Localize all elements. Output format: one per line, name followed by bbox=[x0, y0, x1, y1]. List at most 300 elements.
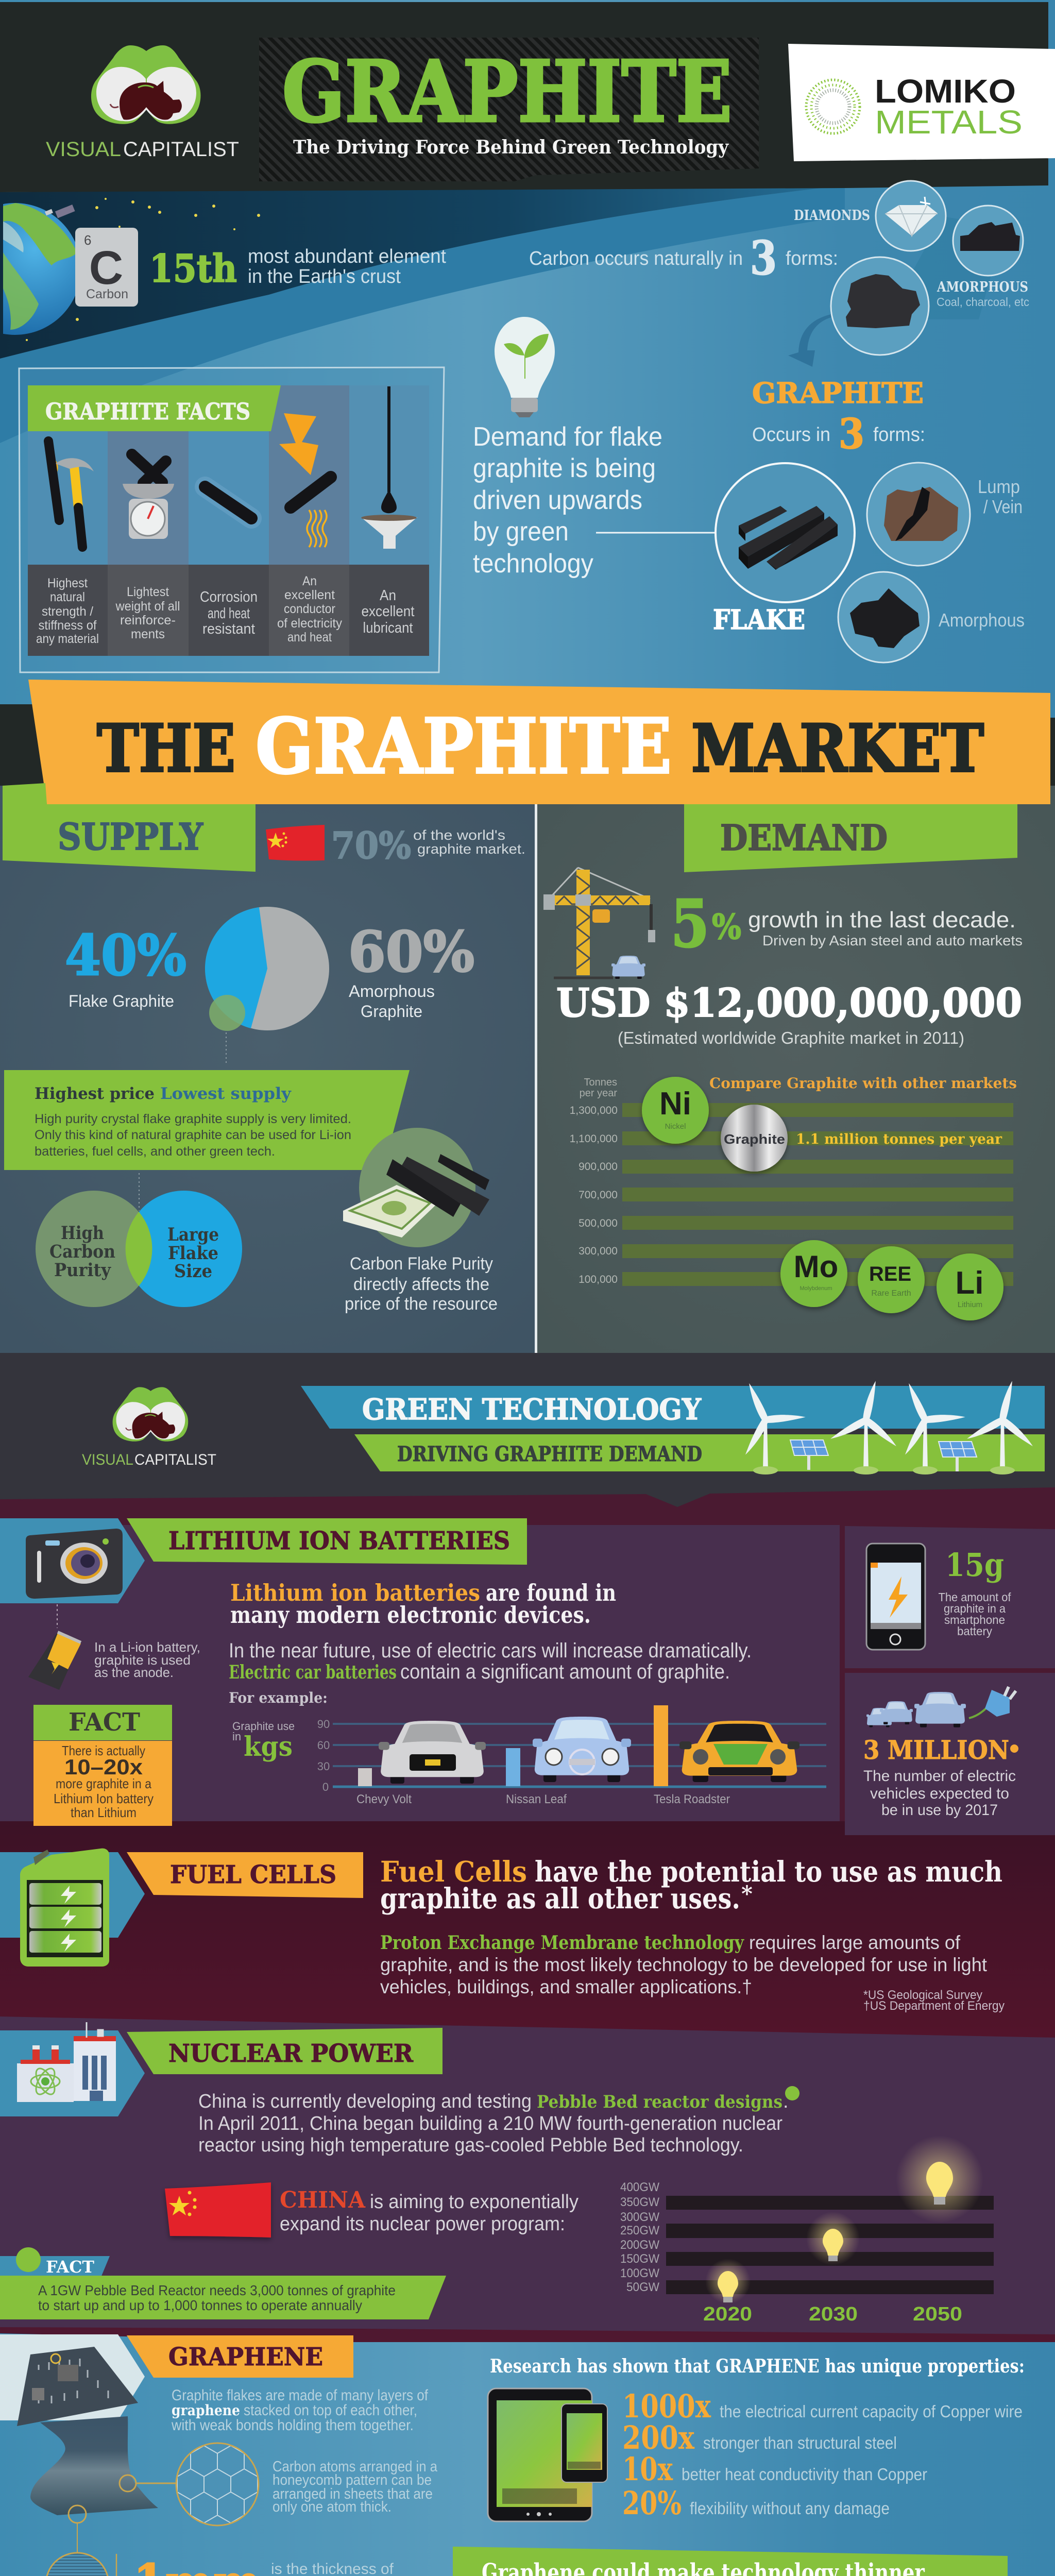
axis title: kgs bbox=[244, 1731, 293, 1762]
callout: china 70% bbox=[266, 824, 525, 867]
text: usd 12 billion bbox=[556, 980, 1022, 1047]
icon: china flag large bbox=[165, 2182, 271, 2238]
axis title bbox=[580, 1077, 617, 1099]
callout: highest price lowest supply: Highest price bbox=[35, 1084, 155, 1103]
marker: molybdenum: Mo bbox=[794, 1249, 838, 1284]
section background: purple and maroon bbox=[0, 1484, 1055, 2349]
text: lithium ion intro: Electric car batteries bbox=[229, 1662, 397, 1683]
text: 15th most abundant bbox=[149, 246, 446, 291]
icon: hammer and graphite rod bbox=[48, 441, 94, 547]
element tile: carbon bbox=[75, 228, 138, 307]
heading: graphite facts bbox=[28, 385, 281, 431]
callout: lithium fact: There is actually bbox=[62, 1743, 145, 1758]
axis labels: 1,100,000 bbox=[570, 1133, 618, 1145]
label: graphite tonnage: 1.1 million tonnes per year bbox=[796, 1131, 1002, 1147]
text: carbon occurs in 3 forms: 3 bbox=[750, 231, 777, 285]
logo: Lomiko Metals: LOMIKO bbox=[875, 73, 1016, 110]
marker: rare earth bbox=[858, 1246, 925, 1313]
axis labels: 100,000 bbox=[578, 1274, 618, 1285]
property: 200x bbox=[622, 2419, 897, 2456]
text: amorphous label: Coal, charcoal, etc bbox=[937, 295, 1029, 309]
property: 20%: 20% bbox=[622, 2484, 682, 2522]
chart: flake vs amorphous pie bbox=[65, 907, 474, 1064]
tab: fuel cells bbox=[0, 1852, 363, 1938]
callout: lithium fact bbox=[33, 1705, 172, 1826]
icon: battery bbox=[28, 1632, 81, 1690]
icon: diamond circle: DIAMONDS bbox=[794, 208, 870, 224]
panel: electric vehicles: 3 MILLION bbox=[863, 1735, 1009, 1765]
text: lithium ion intro: contain a significant amount of graphite. bbox=[400, 1660, 730, 1683]
icon: corrosion resistant rod bbox=[205, 487, 251, 518]
text: pebble bed intro: In April 2011, China began building a 210 MW fourth-generation nuclear bbox=[198, 2113, 782, 2134]
callout: china expansion: is aiming to exponentially bbox=[370, 2191, 578, 2213]
text: demand for flake graphite: Demand for flake bbox=[473, 422, 662, 452]
text: fuel cells intro: Fuel Cells bbox=[380, 1855, 527, 1888]
icon: money with graphite bars bbox=[343, 1128, 489, 1247]
text: carbon flake purity bbox=[345, 1254, 498, 1314]
text: 5% growth: Driven by Asian steel and auto markets bbox=[762, 933, 1023, 948]
text: carbon atoms: Carbon atoms arranged in a bbox=[273, 2459, 438, 2475]
icon: lubricant funnel bbox=[361, 386, 417, 549]
text: graphite occurs in 3 forms: forms: bbox=[873, 424, 925, 446]
text: pebble bed intro: Pebble Bed reactor designs bbox=[537, 2092, 782, 2112]
chart: venn diagram: Large bbox=[167, 1224, 219, 1245]
icon: flake graphite circle: FLAKE bbox=[713, 604, 805, 636]
title: GRAPHITE bbox=[282, 43, 732, 141]
text: lithium ion intro: many modern electronic devices. bbox=[230, 1601, 591, 1629]
marker: lithium: Li bbox=[955, 1265, 984, 1301]
panel: smartphone graphite: graphite in a bbox=[944, 1602, 1006, 1615]
axis labels: 150GW bbox=[620, 2252, 659, 2266]
axis title: in bbox=[232, 1730, 241, 1743]
text: fact labels: strength / bbox=[42, 604, 93, 619]
text: fact labels: excellent bbox=[284, 588, 335, 602]
property: 20% bbox=[622, 2484, 890, 2522]
text: 15th most abundant: in the Earth's crust bbox=[248, 266, 401, 287]
marker: graphite: Graphite bbox=[724, 1131, 785, 1147]
text: graphene layers: stacked on top of each other, bbox=[244, 2402, 417, 2419]
text: fuel cells intro: * bbox=[741, 1881, 753, 1906]
panel: electric vehicles bbox=[863, 1687, 1018, 1819]
text: fact labels: reinforce- bbox=[120, 613, 176, 628]
icon: camera bbox=[26, 1529, 123, 1599]
text: demand for flake graphite bbox=[473, 422, 662, 579]
icon: coal circle bbox=[953, 206, 1023, 276]
callout: highest price lowest supply bbox=[4, 1070, 410, 1170]
text: pebble bed intro bbox=[198, 2086, 799, 2156]
axis labels: 700,000 bbox=[578, 1189, 618, 1201]
marker: graphite bbox=[721, 1105, 788, 1172]
text: graphite occurs in 3 forms bbox=[752, 376, 925, 458]
icon: smartphone bbox=[866, 1544, 925, 1650]
text: graphene layers: Graphite flakes are made of many layers of bbox=[172, 2387, 429, 2404]
logo: visual capitalist small: VISUAL bbox=[82, 1451, 133, 1468]
chart: venn diagram: Carbon bbox=[49, 1241, 115, 1262]
icon: bulb 2030 bbox=[806, 2212, 860, 2265]
axis labels bbox=[570, 1105, 618, 1285]
callout: pebble bed fact: FACT bbox=[46, 2257, 94, 2277]
property: 200x: 200x bbox=[622, 2419, 695, 2456]
marker: nickel: Nickel bbox=[665, 1122, 686, 1131]
banner: driving graphite demand bbox=[354, 1434, 1045, 1471]
panel: smartphone graphite: 15g bbox=[945, 1546, 1004, 1584]
text: fact labels: and heat bbox=[287, 630, 332, 645]
labels: Nissan Leaf bbox=[506, 1792, 567, 1806]
text: 15th most abundant: 15th bbox=[149, 247, 237, 291]
section background: blue top bbox=[0, 0, 1055, 721]
callout: china 70%: 70% bbox=[331, 824, 411, 867]
icon: bulb 2050 bbox=[896, 2136, 983, 2223]
text: carbon atoms: only one atom thick. bbox=[273, 2499, 392, 2515]
logo: Visual Capitalist: VISUAL bbox=[46, 138, 121, 161]
logo: visual capitalist small: CAPITALIST bbox=[134, 1451, 216, 1468]
heading: demand: DEMAND bbox=[720, 818, 888, 859]
grid and axis: 0 bbox=[322, 1781, 329, 1793]
text: 1mm thickness bbox=[133, 2553, 402, 2576]
element tile: carbon: Carbon bbox=[86, 287, 128, 301]
grid and axis bbox=[317, 1718, 826, 1793]
year labels: 2030 bbox=[809, 2303, 858, 2325]
axis labels bbox=[620, 2180, 659, 2294]
text: demand for flake graphite: graphite is being bbox=[473, 453, 656, 483]
text: li-ion anode: as the anode. bbox=[94, 1665, 174, 1680]
marker: molybdenum: Molybdenum bbox=[800, 1285, 832, 1292]
text: li-ion anode: In a Li-ion battery, bbox=[94, 1639, 200, 1655]
text: fact labels: of electricity bbox=[277, 616, 342, 631]
icon: earth with satellite bbox=[0, 198, 260, 341]
axis labels: 350GW bbox=[620, 2195, 659, 2209]
icon: wind turbines and solar panels bbox=[742, 1380, 1035, 1475]
bars bbox=[358, 1705, 668, 1786]
text: sources bbox=[863, 1988, 1005, 2013]
logo: Visual Capitalist bbox=[46, 45, 239, 161]
banner: the graphite market: MARKET bbox=[691, 710, 984, 787]
icon: tesla roadster bbox=[679, 1721, 799, 1782]
year labels: 2050 bbox=[913, 2303, 962, 2325]
text: fact labels bbox=[36, 574, 414, 646]
axis labels: 1,300,000 bbox=[570, 1105, 618, 1116]
text: pebble bed intro: China is currently developing and testing bbox=[198, 2091, 532, 2112]
text: usd 12 billion: USD $12,000,000,000 bbox=[556, 980, 1022, 1026]
property: 1000x: the electrical current capacity of Copper wire bbox=[720, 2402, 1023, 2421]
text: pebble bed intro: . bbox=[783, 2091, 789, 2112]
property: 10x bbox=[622, 2450, 927, 2488]
axis labels: 500,000 bbox=[578, 1217, 618, 1229]
property: 20%: flexibility without any damage bbox=[690, 2499, 890, 2518]
icon: lump vein circle bbox=[867, 463, 1023, 566]
label: 60% amorphous graphite: Graphite bbox=[361, 1002, 422, 1021]
logo: Lomiko Metals: METALS bbox=[875, 104, 1023, 141]
text: fact labels: and heat bbox=[208, 605, 250, 622]
text: graphite occurs in 3 forms: GRAPHITE bbox=[752, 376, 924, 410]
labels bbox=[356, 1792, 730, 1806]
text: proton exchange membrane: requires large amounts of bbox=[749, 1932, 961, 1953]
panel: smartphone graphite: smartphone bbox=[944, 1613, 1005, 1626]
axis labels: 900,000 bbox=[578, 1161, 618, 1173]
icon: flake graphite circle bbox=[713, 463, 855, 636]
icon: bulb 2020 bbox=[705, 2259, 751, 2304]
icon: china flag bbox=[266, 825, 325, 861]
text: graphene layers: graphene bbox=[172, 2402, 240, 2419]
year labels: 2020 bbox=[703, 2303, 752, 2325]
text: carbon occurs in 3 forms: forms: bbox=[786, 248, 838, 269]
panel: smartphone graphite: battery bbox=[957, 1624, 992, 1638]
callout: highest price lowest supply: High purity crystal flake graphite supply is very limited. bbox=[35, 1112, 351, 1126]
heading: graphite facts: GRAPHITE FACTS bbox=[45, 399, 250, 425]
marker: rare earth: Rare Earth bbox=[871, 1289, 911, 1298]
icon: chevy volt bbox=[379, 1721, 486, 1784]
text: graphite occurs in 3 forms: 3 bbox=[839, 410, 864, 458]
grid and axis: 30 bbox=[317, 1760, 330, 1773]
text: li-ion anode bbox=[94, 1639, 200, 1680]
text: sources: *US Geological Survey bbox=[863, 1988, 982, 2002]
icon: lightning and conductor rod bbox=[279, 413, 331, 547]
text: fact labels: weight of all bbox=[115, 599, 180, 614]
property: 200x: stronger than structural steel bbox=[703, 2433, 897, 2452]
text: li-ion anode: graphite is used bbox=[94, 1652, 191, 1668]
year labels bbox=[703, 2303, 962, 2325]
callout: lithium fact: more graphite in a bbox=[56, 1776, 151, 1791]
icon: diamond circle bbox=[794, 181, 1005, 319]
icon: weighing scale bbox=[123, 454, 174, 539]
callout: graphene could make technology bbox=[453, 2547, 1008, 2576]
tab: lithium ion bbox=[0, 1518, 527, 1603]
text: amorphous label: AMORPHOUS bbox=[937, 279, 1028, 295]
property: 1000x: 1000x bbox=[622, 2387, 711, 2425]
labels: Tesla Roadster bbox=[654, 1792, 730, 1806]
callout: lithium fact: than Lithium bbox=[71, 1805, 137, 1820]
axis labels: 400GW bbox=[620, 2180, 659, 2194]
callout: lithium fact: FACT bbox=[69, 1708, 140, 1737]
icon: amorphous graphite circle: Amorphous bbox=[939, 609, 1025, 631]
panel: graphite facts bbox=[19, 367, 444, 672]
marker: lithium bbox=[937, 1253, 1003, 1320]
text: fact labels: An bbox=[302, 574, 317, 588]
marker: nickel: Ni bbox=[659, 1086, 691, 1122]
callout: highest price lowest supply: batteries, fuel cells, and other green tech. bbox=[35, 1144, 275, 1159]
text: carbon flake purity: price of the resource bbox=[345, 1294, 498, 1314]
text: fact labels: stiffness of bbox=[38, 618, 97, 633]
tab: lithium ion: LITHIUM ION BATTERIES bbox=[168, 1527, 510, 1555]
tab: nuclear power: NUCLEAR POWER bbox=[168, 2039, 414, 2068]
banner: green technology: GREEN TECHNOLOGY bbox=[362, 1393, 702, 1427]
text: carbon occurs in 3 forms: Carbon occurs naturally in bbox=[529, 248, 743, 269]
axis labels: 250GW bbox=[620, 2224, 659, 2238]
banner: green technology bbox=[301, 1386, 1045, 1429]
title bbox=[259, 38, 759, 181]
text: pebble bed intro: reactor using high temperature gas-cooled Pebble Bed technology. bbox=[198, 2134, 743, 2156]
text: 5% growth: % bbox=[712, 907, 741, 947]
text: carbon flake purity: directly affects the bbox=[353, 1275, 489, 1294]
axis labels: 300GW bbox=[620, 2210, 659, 2224]
text: 5% growth: growth in the last decade. bbox=[748, 907, 1016, 933]
icon: crane and car bbox=[543, 868, 655, 979]
property: 10x: 10x bbox=[622, 2450, 673, 2488]
label: 40% flake graphite: Flake Graphite bbox=[69, 992, 174, 1010]
section background: graphene bbox=[0, 2327, 1055, 2576]
axis title bbox=[232, 1720, 295, 1762]
marker: molybdenum bbox=[780, 1240, 847, 1307]
title: The Driving Force Behind Green Technology bbox=[293, 137, 729, 158]
callout: pebble bed fact: A 1GW Pebble Bed Reactor needs 3,000 tonnes of graphite bbox=[38, 2282, 396, 2298]
chart: venn diagram: Purity bbox=[54, 1260, 112, 1281]
icon: amorphous graphite circle bbox=[838, 572, 1025, 663]
property: 1000x bbox=[622, 2387, 1023, 2425]
text: proton exchange membrane bbox=[380, 1932, 988, 1997]
text: fuel cells intro bbox=[380, 1855, 1002, 1915]
bars bbox=[622, 1103, 1013, 1286]
arrow: amorphous to graphite bbox=[788, 314, 831, 367]
chart: venn diagram: Flake bbox=[168, 1243, 218, 1264]
text: sources: †US Department of Energy bbox=[863, 1999, 1005, 2013]
text: lithium ion intro: In the near future, use of electric cars will increase dramatically. bbox=[229, 1639, 752, 1662]
text: 5% growth bbox=[671, 886, 1023, 962]
heading: supply bbox=[3, 783, 256, 872]
bars bbox=[666, 2196, 994, 2294]
icon: light bulb with sprout bbox=[495, 317, 555, 417]
text: carbon occurs in 3 forms bbox=[529, 231, 838, 285]
panel: electric vehicles: The number of electric bbox=[863, 1768, 1016, 1785]
chart: nuclear capacity bbox=[620, 2136, 994, 2325]
panel: electric vehicles: be in use by 2017 bbox=[881, 1802, 998, 1819]
text: graphene layers bbox=[171, 2387, 429, 2434]
banner: the graphite market bbox=[28, 680, 1050, 804]
chart: venn diagram: Size bbox=[174, 1261, 212, 1282]
text: graphene layers: with weak bonds holding them together. bbox=[171, 2417, 414, 2434]
axis title: Graphite use bbox=[232, 1720, 295, 1733]
tab: graphene: GRAPHENE bbox=[168, 2343, 323, 2371]
text: fuel cells intro: graphite as all other uses. bbox=[380, 1882, 740, 1915]
icon: nuclear plant bbox=[17, 2022, 116, 2102]
text: lithium ion intro: For example: bbox=[229, 1689, 328, 1706]
icon: amorphous circle bbox=[831, 257, 929, 355]
section: green technology band bbox=[0, 1353, 1055, 1507]
label: 60% amorphous graphite: Amorphous bbox=[349, 982, 435, 1001]
logo: Visual Capitalist: CAPITALIST bbox=[123, 138, 239, 161]
chart: venn diagram bbox=[36, 1191, 242, 1307]
tab: graphene bbox=[0, 2334, 353, 2420]
text: lithium ion intro bbox=[229, 1579, 752, 1706]
element tile: carbon: 6 bbox=[84, 232, 91, 248]
callout: china expansion: expand its nuclear power program: bbox=[280, 2213, 565, 2235]
icon: circuit board and sheet bbox=[17, 2347, 158, 2515]
text: demand for flake graphite: driven upwards bbox=[473, 485, 642, 515]
marker: nickel bbox=[642, 1077, 709, 1144]
section backgrounds: market bbox=[0, 704, 1055, 1353]
icon: stacked sheets detail bbox=[46, 2505, 131, 2576]
icon: fuel can with batteries bbox=[20, 1849, 109, 1967]
callout: china expansion bbox=[165, 2182, 578, 2238]
text: fact labels: ments bbox=[131, 627, 165, 641]
panel: electric vehicles: vehicles expected to bbox=[870, 1785, 1009, 1802]
label: 40% flake graphite: 40% bbox=[65, 923, 186, 988]
axis labels: 50GW bbox=[626, 2280, 659, 2294]
icon: lump vein circle: Lump bbox=[978, 476, 1020, 497]
text: 15th most abundant: most abundant element bbox=[248, 246, 446, 267]
banner: the graphite market: GRAPHITE bbox=[256, 702, 672, 791]
label: 60% amorphous graphite: 60% bbox=[348, 920, 474, 985]
marker: rare earth: REE bbox=[869, 1263, 911, 1285]
label: 60% amorphous graphite bbox=[348, 920, 474, 1021]
callout: highest price lowest supply: Lowest supply bbox=[160, 1084, 292, 1103]
callout: china 70%: of the world's bbox=[413, 827, 505, 843]
text: proton exchange membrane: graphite, and is the most likely technology to be developed for use in light bbox=[380, 1954, 988, 1975]
axis title: per year bbox=[580, 1088, 617, 1099]
text: usd 12 billion: (Estimated worldwide Graphite market in 2011) bbox=[618, 1028, 964, 1047]
axis title: Tonnes bbox=[584, 1077, 617, 1088]
text: amorphous label bbox=[937, 279, 1029, 309]
text: carbon atoms: honeycomb pattern can be bbox=[273, 2472, 432, 2488]
callout: pebble bed fact: to start up and up to 1,000 tonnes to operate annually bbox=[38, 2297, 362, 2313]
heading: compare graphite: Compare Graphite with other markets bbox=[709, 1075, 1017, 1092]
icon: honeycomb detail bbox=[120, 2443, 259, 2526]
text: demand for flake graphite: technology bbox=[473, 549, 593, 579]
text: fact labels: any material bbox=[36, 632, 99, 646]
icon: tablet and phone bbox=[488, 2388, 607, 2521]
text: proton exchange membrane: vehicles, buildings, and smaller applications.† bbox=[380, 1976, 752, 1997]
icon: nissan leaf bbox=[533, 1717, 631, 1782]
text: fact labels: conductor bbox=[284, 602, 335, 616]
text: 5% growth: 5 bbox=[671, 886, 709, 962]
chart: graphite use in kgs bbox=[232, 1705, 826, 1806]
property: 10x: better heat conductivity than Copper bbox=[682, 2465, 927, 2484]
tab: nuclear power bbox=[0, 2028, 443, 2116]
banner: driving graphite demand: DRIVING GRAPHITE DEMAND bbox=[397, 1442, 702, 1466]
axis labels: 200GW bbox=[620, 2238, 659, 2252]
heading: supply: SUPPLY bbox=[58, 815, 203, 858]
callout: lithium fact: Lithium Ion battery bbox=[54, 1791, 154, 1806]
icon: lump vein circle: / Vein bbox=[983, 496, 1023, 517]
text: fact labels: lubricant bbox=[363, 620, 413, 636]
header bar bbox=[0, 2, 1048, 192]
text: proton exchange membrane: Proton Exchange Membrane technology bbox=[380, 1932, 744, 1954]
callout: china expansion: CHINA bbox=[280, 2187, 366, 2213]
text: carbon flake purity: Carbon Flake Purity bbox=[350, 1254, 493, 1274]
grid and axis: 60 bbox=[317, 1739, 330, 1752]
text: fact labels: excellent bbox=[362, 603, 414, 620]
list: graphene properties bbox=[622, 2387, 1023, 2522]
logo: Lomiko Metals bbox=[788, 44, 1055, 161]
axis labels: 100GW bbox=[620, 2266, 659, 2280]
callout: china 70%: graphite market. bbox=[417, 841, 525, 857]
text: fact labels: An bbox=[380, 587, 396, 604]
chart: venn diagram: High bbox=[61, 1223, 104, 1244]
logo: visual capitalist small bbox=[82, 1387, 216, 1468]
text: fact labels: Highest bbox=[47, 576, 88, 590]
callout: pebble bed fact bbox=[0, 2247, 446, 2319]
text: carbon atoms bbox=[273, 2459, 438, 2515]
text: fact labels: resistant bbox=[202, 621, 255, 637]
text: graphite occurs in 3 forms: Occurs in bbox=[752, 424, 830, 446]
banner: the graphite market: THE bbox=[97, 710, 235, 787]
panel: smartphone graphite: The amount of bbox=[939, 1590, 1011, 1604]
labels: Chevy Volt bbox=[356, 1792, 412, 1806]
text: fact labels: Lightest bbox=[127, 585, 169, 599]
grid and axis: 90 bbox=[317, 1718, 330, 1731]
text: fact labels: Corrosion bbox=[200, 589, 258, 605]
element tile: carbon: C bbox=[89, 242, 123, 294]
axis labels: 300,000 bbox=[578, 1245, 618, 1257]
callout: lithium fact: 10–20x bbox=[64, 1755, 143, 1779]
callout: highest price lowest supply: Only this kind of natural graphite can be used for Li-ion bbox=[35, 1128, 351, 1142]
text: fact labels: natural bbox=[50, 590, 85, 604]
text: demand for flake graphite: by green bbox=[473, 517, 569, 547]
icon: electric cars and plug bbox=[866, 1687, 1016, 1727]
text: lithium ion intro: are found in bbox=[486, 1579, 616, 1606]
chart: tonnes per year comparison bbox=[570, 1075, 1017, 1320]
panel: smartphone graphite bbox=[866, 1544, 1011, 1650]
text: carbon atoms: arranged in sheets that are bbox=[273, 2486, 433, 2502]
